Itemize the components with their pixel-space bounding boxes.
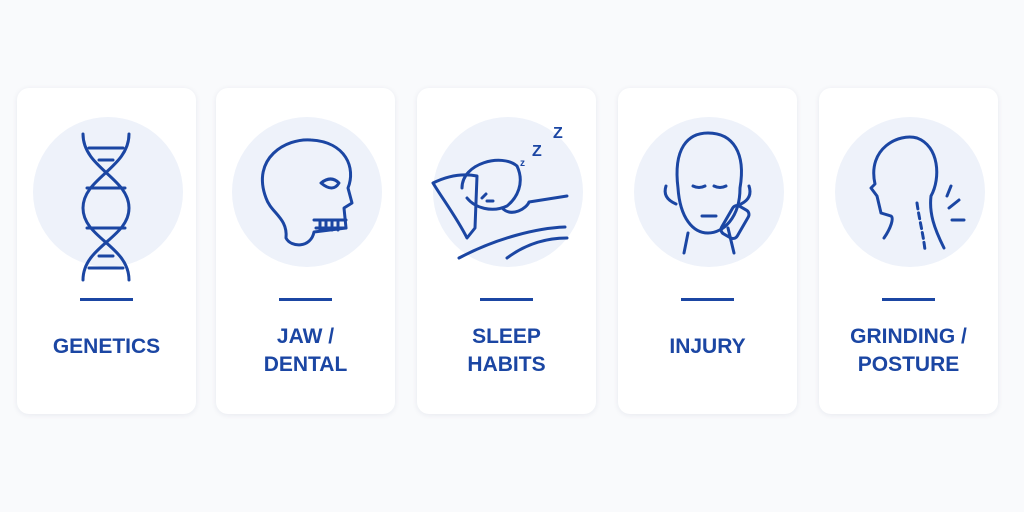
icon: profile neck — [870, 136, 966, 250]
icon: dna — [82, 132, 130, 282]
card: injury — [618, 88, 797, 414]
icon: face with bandage — [664, 132, 752, 254]
label: sleep habits: SLEEP — [472, 325, 541, 348]
label: injury: INJURY — [669, 335, 746, 358]
label: grinding posture — [850, 325, 967, 376]
label: genetics: GENETICS — [53, 335, 160, 358]
card: jaw dental — [216, 88, 395, 414]
card: grinding posture — [819, 88, 998, 414]
icon: sleeping person: Z — [553, 125, 563, 142]
card: genetics — [17, 88, 196, 414]
label: grinding posture: POSTURE — [858, 353, 959, 376]
icon: sleeping person — [431, 125, 568, 260]
icon: skull — [260, 138, 354, 246]
label: grinding posture: GRINDING / — [850, 325, 967, 348]
card: sleep — [417, 88, 596, 414]
label: sleep habits: HABITS — [467, 353, 546, 376]
label: jaw dental — [264, 325, 347, 376]
icon: sleeping person: Z — [532, 143, 542, 160]
label: jaw dental: DENTAL — [264, 353, 347, 376]
icon: sleeping person: z — [520, 158, 525, 169]
label: sleep habits — [467, 325, 546, 376]
label: jaw dental: JAW / — [277, 325, 334, 348]
